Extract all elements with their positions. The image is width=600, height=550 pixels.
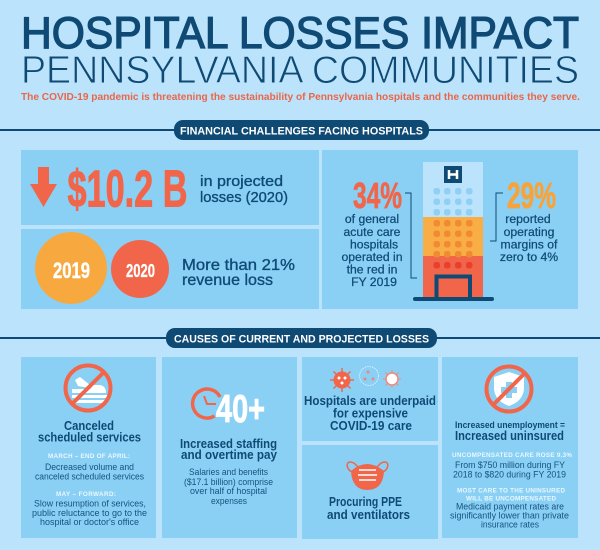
panel: underpaid xyxy=(302,357,438,441)
label: in projected xyxy=(200,174,283,190)
text: march to april xyxy=(35,453,144,482)
heading xyxy=(304,393,436,433)
text: may forward xyxy=(32,491,147,527)
section heading: financial challenges: FINANCIAL CHALLENGES FACING HOSPITALS xyxy=(180,126,423,138)
stat: 34%: operated in xyxy=(342,250,402,264)
heading: Increased unemployment = xyxy=(455,420,565,431)
stat: 29%: margins of xyxy=(501,238,558,252)
label xyxy=(200,174,288,206)
panel: canceled services xyxy=(21,357,156,538)
stat: 29%: 29% xyxy=(507,175,556,216)
stat: 34%: of general xyxy=(345,212,399,226)
text: medicaid: MOST CARE TO THE UNINSURED xyxy=(457,488,565,494)
circle: 2020: 2020 xyxy=(126,261,155,281)
icon: viruses xyxy=(330,366,401,392)
subtitle: The COVID-19 pandemic is threatening the sustainability of Pennsylvania hospitals and the communities they serve. xyxy=(21,91,580,103)
stat: 40+: 40+ xyxy=(216,388,265,431)
circle: 2019 xyxy=(35,232,107,304)
text: medicaid: WILL BE UNCOMPENSATED xyxy=(466,496,556,502)
circle: 2020 xyxy=(111,240,169,298)
text: medicaid: significantly lower than private xyxy=(450,510,569,520)
stat: 29%: zero to 4% xyxy=(500,250,558,264)
heading: Hospitals are underpaid xyxy=(304,393,436,408)
heading: Increased staffing xyxy=(180,436,277,451)
stat: 34%: hospitals xyxy=(350,238,398,252)
icon: mask xyxy=(347,462,388,490)
panel: PPE xyxy=(302,445,438,539)
heading xyxy=(455,420,565,443)
text: medicaid: Medicaid payment rates are xyxy=(456,500,564,512)
stat: 34%: 34% xyxy=(353,175,402,216)
panel: projected losses xyxy=(21,150,319,225)
stat: 34%: the red in xyxy=(347,262,397,276)
panel: staffing xyxy=(162,357,297,538)
stat: 34%: acute care xyxy=(344,225,401,239)
text: uncompensated care xyxy=(452,452,572,480)
label: revenue loss xyxy=(182,272,273,289)
text: uncompensated care: From $750 million during FY xyxy=(455,459,566,470)
section heading: causes: CAUSES OF CURRENT AND PROJECTED LOSSES xyxy=(174,334,429,346)
text: medicaid: insurance rates xyxy=(481,518,539,530)
circle: 2019: 2019 xyxy=(53,258,90,283)
heading: Increased uninsured xyxy=(455,428,564,443)
text: may forward: public reluctance to go to the xyxy=(32,507,147,518)
stat: 29% xyxy=(500,175,558,264)
heading xyxy=(327,494,410,522)
text: may forward: Slow resumption of services, xyxy=(34,498,146,508)
text: salaries: ($17.1 billion) comprise xyxy=(184,476,273,487)
text: salaries: Salaries and benefits xyxy=(189,466,268,477)
text: salaries: over half of hospital xyxy=(190,485,267,496)
icon: down arrow xyxy=(30,167,57,207)
bracket: 29% xyxy=(490,193,503,241)
label xyxy=(182,257,295,289)
heading: scheduled services xyxy=(38,430,141,444)
text: march to april: Decreased volume and xyxy=(45,461,134,472)
big number: $10.2 B xyxy=(68,160,188,218)
heading: Procuring PPE xyxy=(329,494,402,509)
panel: revenue loss xyxy=(21,229,319,309)
text: march to april: canceled scheduled services xyxy=(35,470,144,482)
stat: 34%: FY 2019 xyxy=(351,275,397,289)
panel: uninsured xyxy=(442,357,578,538)
title xyxy=(21,9,579,92)
title: HOSPITAL LOSSES IMPACT xyxy=(21,9,579,58)
text: medicaid xyxy=(450,488,569,530)
heading: COVID-19 care xyxy=(330,418,412,433)
icon: clock xyxy=(193,389,220,418)
label: losses (2020) xyxy=(200,190,288,206)
text: salaries: expenses xyxy=(211,495,247,506)
icon: no hospital bed xyxy=(66,366,110,410)
bracket: 34% xyxy=(405,193,417,278)
text: march to april: MARCH – END OF APRIL: xyxy=(48,453,130,460)
text: salaries xyxy=(184,466,273,506)
heading: for expensive xyxy=(333,406,408,420)
text: uncompensated care: UNCOMPENSATED CARE ROSE 9.3% xyxy=(452,452,572,459)
title: PENNSYLVANIA COMMUNITIES xyxy=(21,49,579,92)
section heading: financial challenges xyxy=(0,120,600,140)
panel: hospital margins xyxy=(322,150,578,309)
section heading: causes xyxy=(0,328,600,348)
text: may forward: MAY – FORWARD: xyxy=(56,491,116,498)
stat: 29%: reported xyxy=(505,212,551,226)
text: may forward: hospital or doctor's office xyxy=(40,516,139,527)
heading: and overtime pay xyxy=(181,447,278,462)
icon: no shield xyxy=(486,366,532,412)
label: More than 21% xyxy=(182,257,295,274)
text: uncompensated care: 2018 to $820 during FY 2019 xyxy=(453,468,566,480)
heading xyxy=(38,418,141,444)
heading: and ventilators xyxy=(327,507,410,522)
stat: 29%: operating xyxy=(504,225,554,239)
stat: 34% xyxy=(342,175,402,289)
icon: hospital building xyxy=(413,162,494,301)
heading: Canceled xyxy=(64,418,114,433)
heading xyxy=(180,436,278,462)
